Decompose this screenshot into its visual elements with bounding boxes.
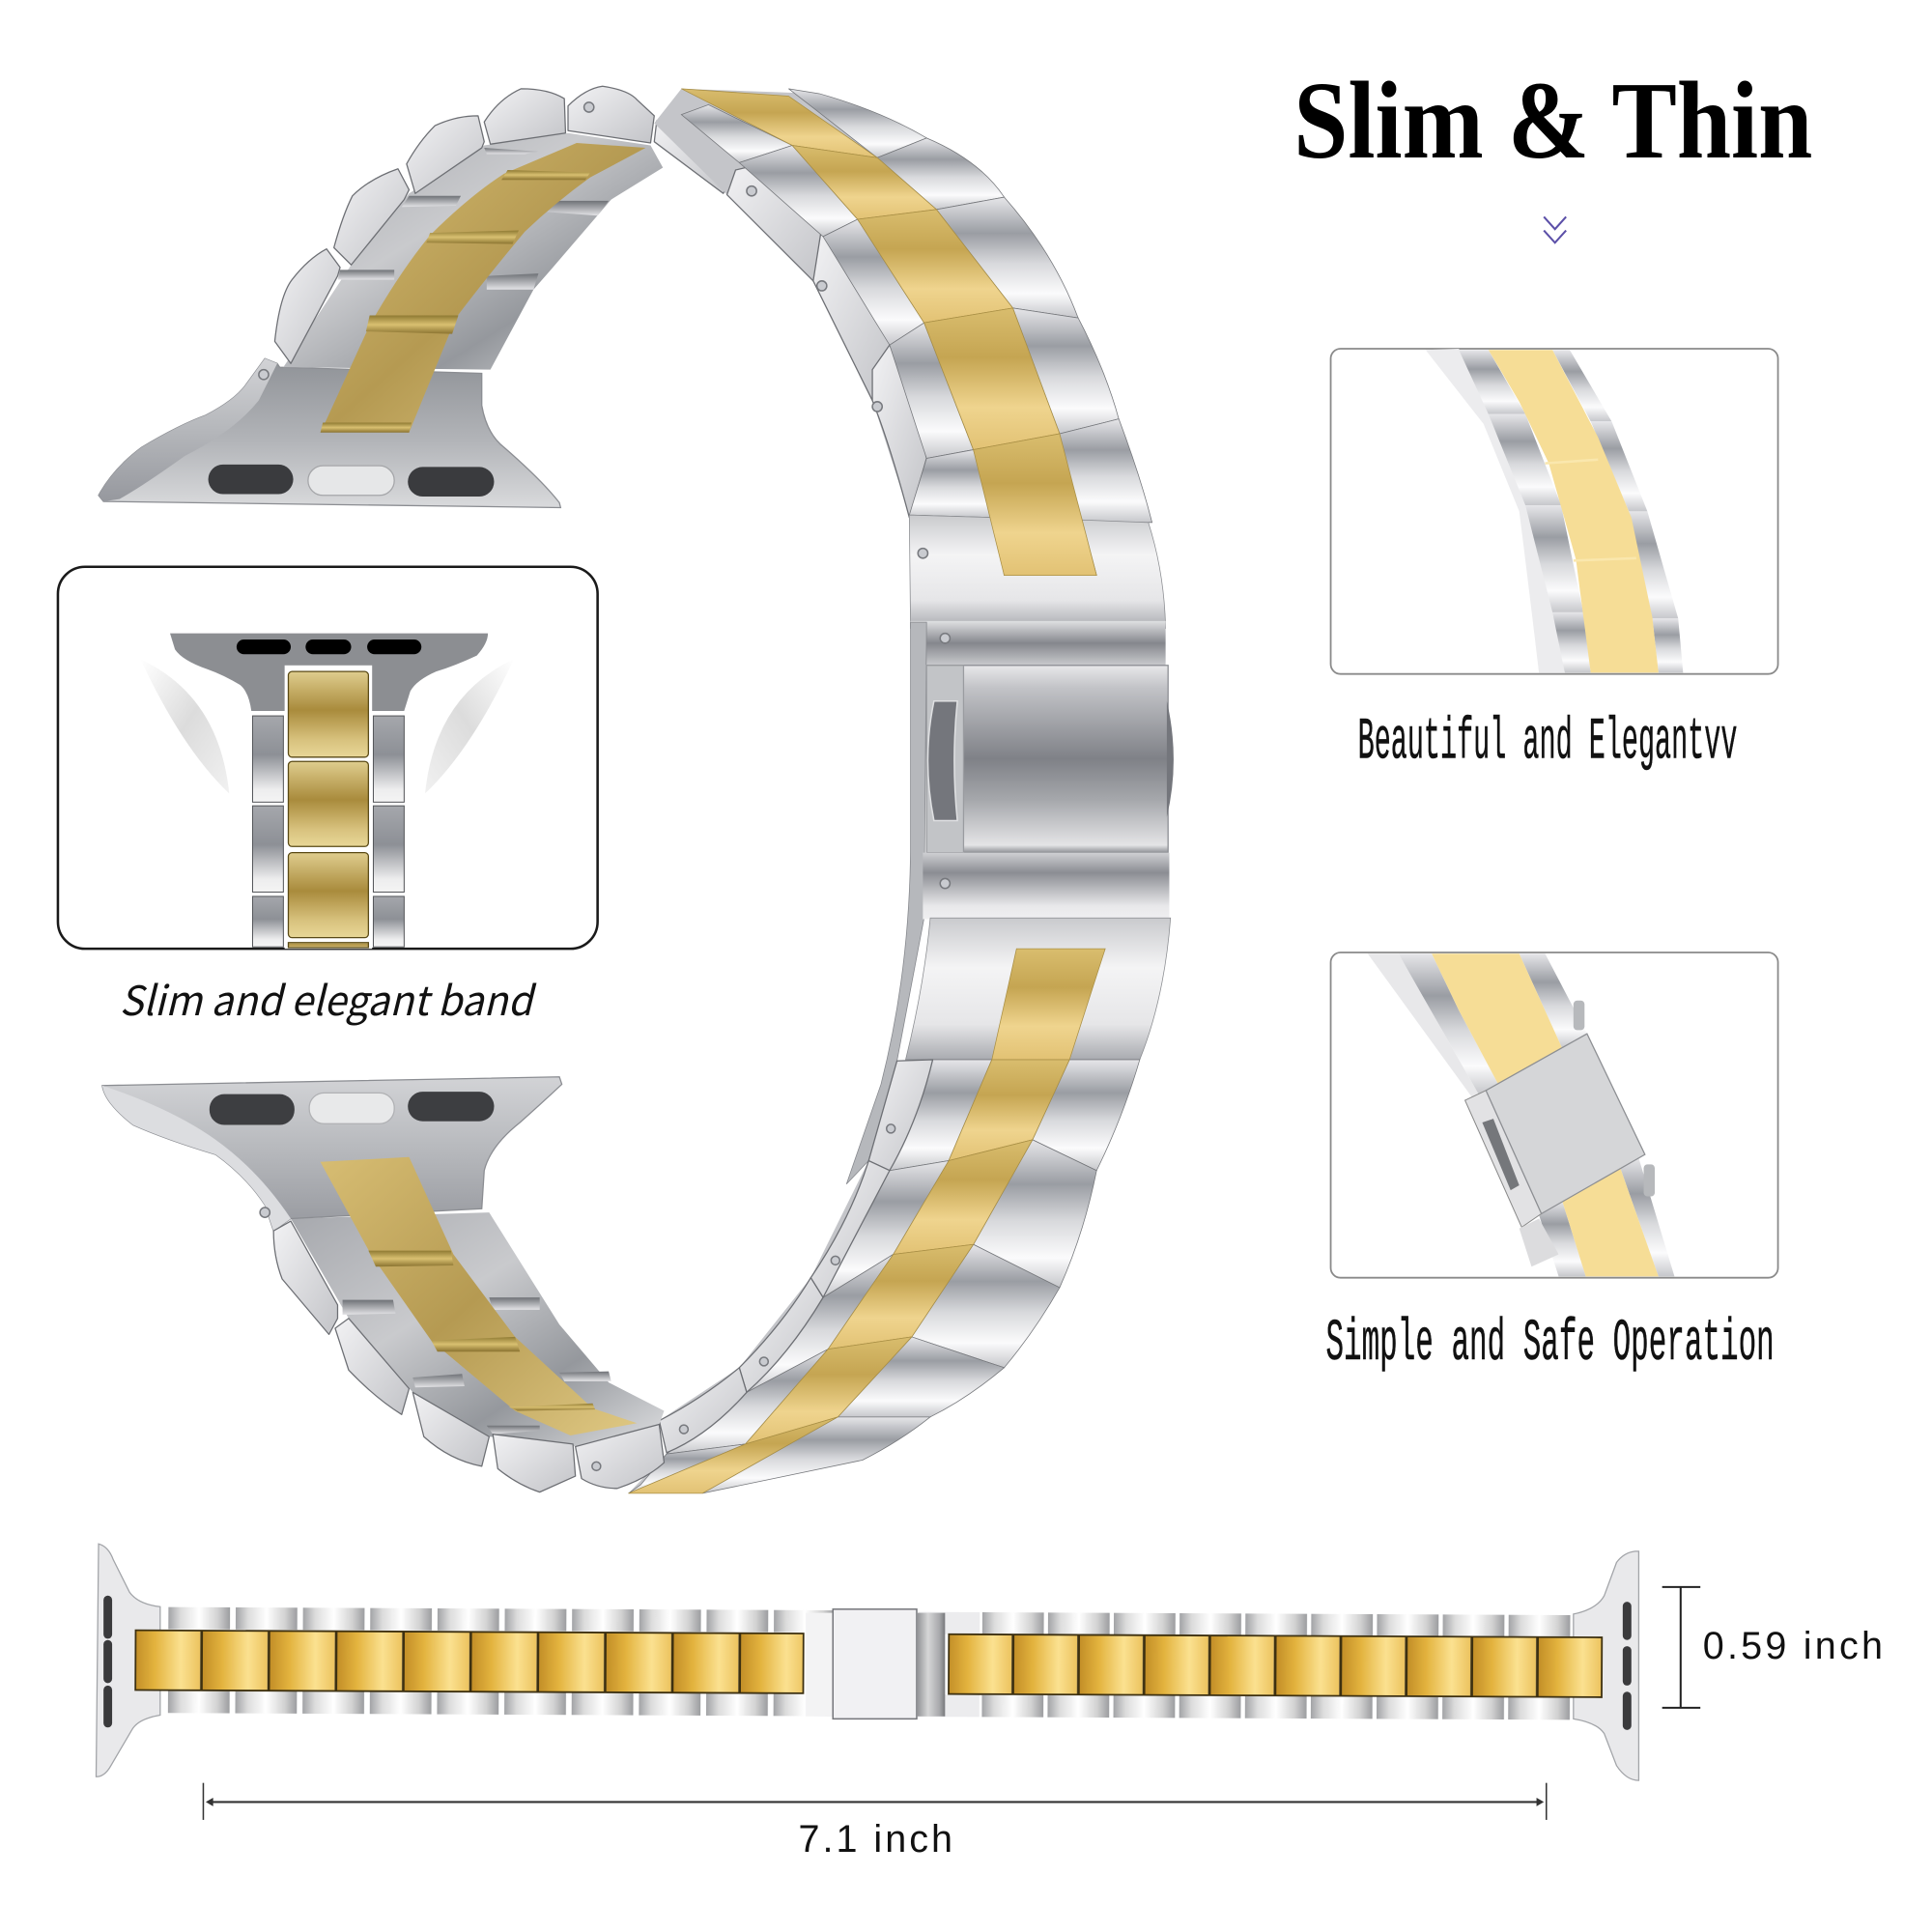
- band top right: inner pin faces: [727, 162, 926, 518]
- clasp top end link: [909, 515, 1166, 666]
- right lug: [1574, 1551, 1638, 1780]
- icon: left shadow crescent: [140, 659, 229, 793]
- clasp plate: [1486, 1034, 1645, 1213]
- icon: right shadow crescent: [425, 659, 514, 793]
- width dimension bracket: [1662, 1587, 1700, 1708]
- light inner face: [1426, 349, 1565, 672]
- lower silver links: [1539, 1158, 1674, 1276]
- gold centre: [1489, 350, 1659, 672]
- bottom lug connector: [102, 1077, 562, 1231]
- band top right: gold centre links: [681, 89, 1096, 576]
- lower gold links: [1562, 1168, 1659, 1276]
- band bottom right: silver base: [629, 1060, 1140, 1493]
- clasp sheath: [846, 622, 926, 1184]
- folded clasp: [806, 1609, 945, 1719]
- band top right: silver base: [654, 89, 1152, 523]
- title: Slim & Thin: [1293, 59, 1812, 182]
- left lug: [96, 1544, 160, 1776]
- flat band diagram: [96, 1544, 1638, 1780]
- icon: double chevron down: [1544, 216, 1566, 242]
- caption: slim and elegant band: Slim and elegant band: [120, 969, 537, 1028]
- upper arm scalloped edge links: [274, 86, 735, 363]
- band top right: inner silver row: [681, 104, 993, 518]
- clasp: [923, 666, 1174, 920]
- upper silver links: [1399, 953, 1587, 1094]
- panel: simple and safe operation close-up: [1331, 952, 1778, 1278]
- top lug connector: [99, 358, 560, 508]
- lower arm scalloped edge links: [273, 1221, 665, 1492]
- silver and gold rows: [135, 1606, 1602, 1720]
- band bottom right: gold centre links: [629, 949, 1105, 1493]
- length dimension arrow: [203, 1783, 1547, 1820]
- lower arm gold stripe: [321, 1157, 637, 1435]
- outer silver row: [1552, 350, 1683, 672]
- lug top view: [170, 634, 488, 949]
- width label: 0.59 inch: [1703, 1625, 1883, 1667]
- clasp side: [1465, 1091, 1559, 1266]
- gold centre links: [288, 671, 368, 948]
- band bottom right: pin faces: [659, 1060, 933, 1453]
- clasp buttons: [1574, 1001, 1655, 1197]
- light inner face: [1368, 953, 1479, 1097]
- lower arm silver links: [291, 1212, 665, 1446]
- band bottom right: links: [629, 918, 1171, 1493]
- length label: 7.1 inch: [799, 1818, 952, 1861]
- silver side links: [252, 716, 404, 947]
- gold joints: [1545, 460, 1636, 560]
- panel: slim band close-up: [58, 567, 598, 949]
- inner silver row: [1459, 350, 1591, 672]
- band top right: outer silver row: [788, 89, 1152, 523]
- panel: beautiful and elegant close-up: [1331, 349, 1778, 674]
- upper arm silver links: [283, 133, 663, 370]
- upper arm gold stripe: [321, 143, 645, 433]
- upper gold links: [1432, 953, 1562, 1084]
- main curved watch band: [99, 86, 1174, 1493]
